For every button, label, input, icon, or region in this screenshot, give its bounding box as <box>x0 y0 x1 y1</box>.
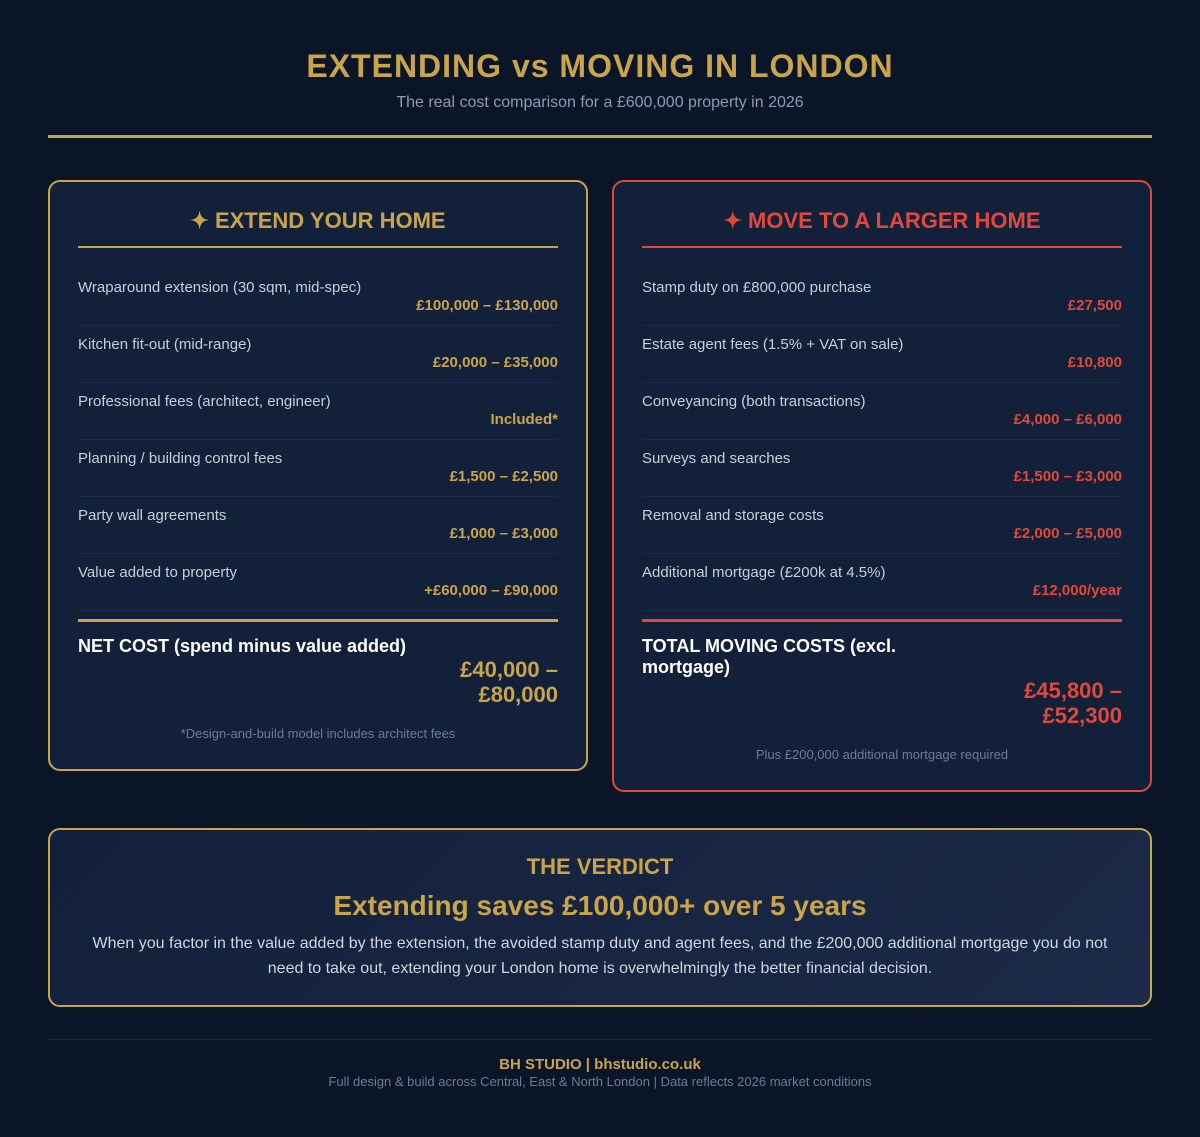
row: conveyancing <box>642 383 1122 440</box>
row: estate agent <box>642 326 1122 383</box>
row: value added: Value added to property <box>78 564 237 581</box>
total moving costs: mortgage) <box>642 657 730 677</box>
row: planning <box>78 440 558 497</box>
verdict headline: Extending saves £100,000+ over 5 years <box>333 890 867 921</box>
footnote: Plus £200,000 additional mortgage required <box>756 747 1008 762</box>
row: surveys <box>642 440 1122 497</box>
heading: move: ✦ MOVE TO A LARGER HOME <box>723 208 1041 233</box>
footnote: *Design-and-build model includes architect fees <box>181 726 455 741</box>
heading: extend <box>78 208 558 248</box>
row: wraparound: £100,000 – £130,000 <box>416 297 558 314</box>
row: kitchen: Kitchen fit-out (mid-range) <box>78 336 251 353</box>
row: professional fees <box>78 383 558 440</box>
row: estate agent: £10,800 <box>1068 354 1122 371</box>
row: planning: Planning / building control fees <box>78 450 282 467</box>
row: mortgage: Additional mortgage (£200k at 4.5%) <box>642 564 885 581</box>
row: mortgage: £12,000/year <box>1033 582 1122 599</box>
row: wraparound <box>78 269 558 326</box>
footer text: Full design & build across Central, East & North London | Data reflects 2026 market conditions <box>328 1074 872 1089</box>
row: surveys: £1,500 – £3,000 <box>1014 468 1122 485</box>
total moving costs: £52,300 <box>1042 703 1122 728</box>
row: planning: £1,500 – £2,500 <box>450 468 558 485</box>
net cost total: £80,000 <box>478 682 558 707</box>
row: mortgage <box>642 554 1122 611</box>
panel: move to a larger home <box>612 180 1152 792</box>
row: party wall: £1,000 – £3,000 <box>450 525 558 542</box>
verdict body: When you factor in the value added by the extension, the avoided stamp duty and agent fees, and the £200,000 additional mortgage you do not need to take out, extending your London home is overwhelmingly the better financial decision. <box>93 935 1107 977</box>
row: stamp duty <box>642 269 1122 326</box>
total moving costs: £45,800 – <box>1024 678 1122 703</box>
row: stamp duty: Stamp duty on £800,000 purchase <box>642 279 871 296</box>
row: estate agent: Estate agent fees (1.5% + VAT on sale) <box>642 336 903 353</box>
verdict label: THE VERDICT <box>527 854 673 879</box>
row: removal: £2,000 – £5,000 <box>1014 525 1122 542</box>
row: value added: +£60,000 – £90,000 <box>424 582 558 599</box>
total moving costs <box>642 619 1122 728</box>
row: conveyancing: Conveyancing (both transactions) <box>642 393 865 410</box>
row: kitchen: £20,000 – £35,000 <box>433 354 558 371</box>
row: professional fees: Professional fees (architect, engineer) <box>78 393 331 410</box>
row: removal: Removal and storage costs <box>642 507 824 524</box>
verdict box <box>48 828 1152 1007</box>
row: kitchen <box>78 326 558 383</box>
title: EXTENDING vs MOVING IN LONDON <box>306 48 894 84</box>
total moving costs: TOTAL MOVING COSTS (excl. <box>642 636 896 656</box>
row: removal <box>642 497 1122 554</box>
row: wraparound: Wraparound extension (30 sqm, mid-spec) <box>78 279 361 296</box>
net cost total: NET COST (spend minus value added) <box>78 636 406 656</box>
row: conveyancing: £4,000 – £6,000 <box>1014 411 1122 428</box>
subtitle: The real cost comparison for a £600,000 property in 2026 <box>396 94 804 111</box>
row: surveys: Surveys and searches <box>642 450 790 467</box>
net cost total: £40,000 – <box>460 657 558 682</box>
panel: extend your home <box>48 180 588 771</box>
row: party wall: Party wall agreements <box>78 507 226 524</box>
heading: move <box>642 208 1122 248</box>
row: professional fees: Included* <box>490 411 558 428</box>
heading: extend: ✦ EXTEND YOUR HOME <box>190 208 446 233</box>
row: value added <box>78 554 558 611</box>
row: party wall <box>78 497 558 554</box>
net cost total <box>78 619 558 707</box>
footer brand: BH STUDIO | bhstudio.co.uk <box>499 1056 701 1073</box>
row: stamp duty: £27,500 <box>1068 297 1122 314</box>
